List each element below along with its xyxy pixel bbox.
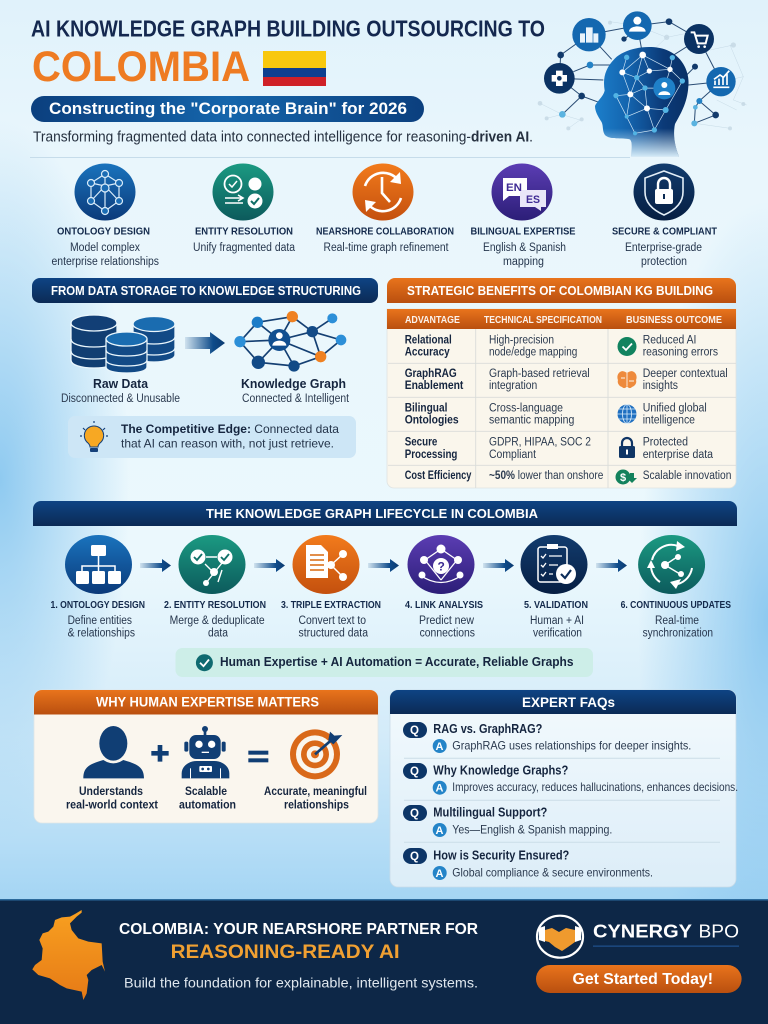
label: raw data bbox=[61, 377, 180, 405]
FAQ 3 bbox=[403, 805, 612, 837]
callout: human expertise plus AI: Human Expertise + AI Automation = Accurate, Reliable Graphs bbox=[220, 654, 574, 669]
step 6: continuous updates bbox=[621, 535, 731, 640]
row: bilingual ontologies bbox=[405, 402, 707, 427]
step 4: link analysis: ? bbox=[438, 560, 445, 574]
FAQ 4: Q bbox=[410, 851, 419, 863]
step 6: continuous updates: Real-time bbox=[655, 615, 699, 627]
callout: competitive edge: that AI can reason with, not just retrieve. bbox=[121, 436, 334, 450]
feature: bilingual expertise: EN bbox=[506, 182, 522, 194]
step 6: continuous updates: 6. CONTINUOUS UPDATES bbox=[621, 599, 731, 611]
step 1: ontology design: Define entities bbox=[68, 615, 132, 627]
logo: Cynergy BPO: BPO bbox=[698, 921, 739, 942]
feature: secure and compliant: protection bbox=[641, 256, 687, 268]
arrow bbox=[483, 559, 514, 572]
caption: automation: Scalable bbox=[185, 786, 227, 798]
heading bbox=[387, 278, 736, 303]
footer banner bbox=[0, 899, 768, 1024]
feature: nearshore collaboration: Real-time graph refinement bbox=[324, 242, 449, 254]
step 6: continuous updates: synchronization bbox=[643, 628, 713, 640]
FAQ 4 bbox=[403, 848, 653, 880]
FAQ 1: A bbox=[436, 741, 444, 753]
feature row bbox=[52, 164, 718, 268]
heading: WHY HUMAN EXPERTISE MATTERS bbox=[96, 695, 319, 710]
step 4: link analysis: 4. LINK ANALYSIS bbox=[405, 599, 483, 611]
label: raw data: Disconnected & Unusable bbox=[61, 393, 180, 405]
footer tagline: Build the foundation for explainable, intelligent systems. bbox=[124, 975, 478, 991]
feature: ontology design: enterprise relationships bbox=[52, 256, 159, 268]
row: relational accuracy: Accuracy bbox=[405, 347, 450, 359]
row: relational accuracy: reasoning errors bbox=[643, 347, 718, 359]
arrow bbox=[185, 332, 225, 354]
feature: entity resolution: Unify fragmented data bbox=[193, 242, 296, 254]
row: cost efficiency: ~50% lower than onshore bbox=[489, 470, 603, 482]
arrow bbox=[140, 559, 171, 572]
heading bbox=[33, 501, 737, 526]
step 4: link analysis: Predict new bbox=[419, 615, 475, 627]
step 3: triple extraction bbox=[281, 535, 381, 640]
row: relational accuracy: Reduced AI bbox=[643, 334, 696, 346]
FAQ 1: RAG vs. GraphRAG? bbox=[433, 722, 542, 736]
FAQ 1 bbox=[403, 722, 691, 753]
icon: human, robot, target equation bbox=[83, 726, 342, 779]
FAQ 3: Multilingual Support? bbox=[433, 805, 547, 819]
logo: Cynergy BPO: CYNERGY bbox=[593, 921, 693, 942]
arrow bbox=[368, 559, 399, 572]
feature: nearshore collaboration: NEARSHORE COLLABORATION bbox=[316, 226, 454, 238]
heading bbox=[390, 690, 736, 714]
row: graphrag enablement: Deeper contextual bbox=[643, 368, 728, 380]
feature: secure and compliant: SECURE & COMPLIANT bbox=[612, 226, 718, 238]
row: secure processing: Processing bbox=[405, 449, 457, 461]
panel: from data storage to knowledge structuring bbox=[32, 278, 378, 458]
row: graphrag enablement: Graph-based retrieval bbox=[489, 368, 590, 380]
FAQ 3: Yes—English & Spanish mapping. bbox=[452, 822, 612, 836]
FAQ 1: GraphRAG uses relationships for deeper insights. bbox=[452, 738, 691, 752]
step 4: link analysis bbox=[405, 535, 483, 640]
feature: ontology design: Model complex bbox=[70, 242, 140, 254]
icon: map of Colombia bbox=[32, 910, 105, 1000]
logo: Cynergy BPO bbox=[537, 916, 739, 958]
feature: ontology design: ONTOLOGY DESIGN bbox=[57, 226, 150, 238]
heading: STRATEGIC BENEFITS OF COLOMBIAN KG BUILDING bbox=[407, 283, 713, 298]
row: bilingual ontologies: Ontologies bbox=[405, 415, 459, 427]
feature: bilingual expertise: mapping bbox=[503, 256, 544, 268]
FAQ 2: Why Knowledge Graphs? bbox=[433, 763, 568, 777]
arrow bbox=[596, 559, 627, 572]
icon: Colombian flag bbox=[263, 51, 326, 86]
footer headline: COLOMBIA: YOUR NEARSHORE PARTNER FOR bbox=[119, 921, 478, 938]
footer highlight: REASONING-READY AI bbox=[171, 941, 400, 963]
header bbox=[30, 11, 747, 158]
heading: EXPERT FAQs bbox=[522, 695, 615, 710]
step 2: entity resolution: 2. ENTITY RESOLUTION bbox=[164, 599, 266, 611]
step 5: validation bbox=[520, 535, 588, 640]
icon: knowledge graph network bbox=[234, 311, 346, 372]
step 5: validation: 5. VALIDATION bbox=[524, 599, 588, 611]
feature: bilingual expertise: BILINGUAL EXPERTISE bbox=[470, 226, 576, 238]
row: graphrag enablement: insights bbox=[643, 380, 678, 392]
row: relational accuracy bbox=[405, 334, 718, 359]
panel: knowledge graph lifecycle bbox=[33, 501, 737, 677]
FAQ 2 bbox=[403, 763, 738, 795]
button: get started: Get Started Today! bbox=[572, 971, 713, 988]
row: bilingual ontologies: semantic mapping bbox=[489, 415, 574, 427]
step 5: validation: verification bbox=[533, 628, 582, 640]
label: knowledge graph: Knowledge Graph bbox=[241, 377, 346, 391]
table header row: TECHNICAL SPECIFICATION bbox=[484, 314, 602, 326]
step 1: ontology design: & relationships bbox=[68, 628, 135, 640]
panel: strategic benefits table bbox=[387, 278, 736, 488]
row: graphrag enablement: GraphRAG bbox=[405, 368, 457, 380]
row: cost efficiency: Scalable innovation bbox=[643, 470, 731, 482]
row: cost efficiency: $ bbox=[620, 472, 626, 484]
FAQ 4: Global compliance & secure environments. bbox=[452, 865, 653, 879]
row: bilingual ontologies: intelligence bbox=[643, 415, 695, 427]
row: bilingual ontologies: Unified global bbox=[643, 402, 707, 414]
feature: nearshore collaboration bbox=[316, 164, 454, 254]
title: AI KNOWLEDGE GRAPH BUILDING OUTSOURCING TO bbox=[31, 16, 545, 42]
step 1: ontology design: 1. ONTOLOGY DESIGN bbox=[50, 599, 145, 611]
feature: bilingual expertise bbox=[470, 164, 576, 268]
title country: COLOMBIA bbox=[32, 43, 250, 91]
row: relational accuracy: High-precision bbox=[489, 334, 554, 346]
feature: entity resolution bbox=[193, 164, 296, 254]
row: cost efficiency bbox=[405, 470, 731, 484]
caption: human: real-world context bbox=[66, 799, 158, 811]
heading: THE KNOWLEDGE GRAPH LIFECYCLE IN COLOMBIA bbox=[206, 506, 539, 521]
table header row: ADVANTAGE bbox=[405, 314, 460, 326]
caption: automation: automation bbox=[179, 799, 236, 811]
heading: FROM DATA STORAGE TO KNOWLEDGE STRUCTURING bbox=[51, 283, 361, 298]
panel: why human expertise matters bbox=[34, 690, 378, 823]
subtitle pill: Constructing the "Corporate Brain" for 2026 bbox=[49, 100, 407, 118]
caption: result bbox=[264, 786, 367, 811]
table bbox=[387, 309, 736, 488]
illustration: head with knowledge network bbox=[538, 11, 747, 158]
row: secure processing: Protected bbox=[643, 436, 688, 448]
subtitle pill bbox=[31, 96, 424, 122]
icon: raw data stacks bbox=[71, 315, 175, 373]
row: secure processing: GDPR, HIPAA, SOC 2 bbox=[489, 436, 591, 448]
FAQ 1: Q bbox=[410, 725, 419, 737]
row: bilingual ontologies: Bilingual bbox=[405, 402, 447, 414]
label: knowledge graph: Connected & Intelligent bbox=[242, 393, 350, 405]
step 4: link analysis: connections bbox=[420, 628, 475, 640]
row: relational accuracy: Relational bbox=[405, 334, 452, 346]
caption: human bbox=[66, 786, 158, 811]
caption: automation bbox=[179, 786, 236, 811]
row: relational accuracy: node/edge mapping bbox=[489, 347, 577, 359]
row: graphrag enablement: integration bbox=[489, 380, 537, 392]
row: secure processing: Secure bbox=[405, 436, 437, 448]
label: raw data: Raw Data bbox=[93, 377, 149, 391]
step 3: triple extraction: Convert text to bbox=[298, 615, 366, 627]
table header row bbox=[387, 309, 736, 329]
caption: result: relationships bbox=[284, 799, 349, 811]
heading bbox=[32, 278, 378, 303]
row: secure processing: Compliant bbox=[489, 449, 537, 461]
callout: competitive edge: The Competitive Edge: Connected data bbox=[121, 422, 339, 436]
feature: bilingual expertise: English & Spanish bbox=[483, 242, 566, 254]
label: knowledge graph bbox=[241, 377, 350, 405]
row: graphrag enablement: Enablement bbox=[405, 380, 464, 392]
arrow bbox=[254, 559, 285, 572]
table header row: BUSINESS OUTCOME bbox=[626, 314, 722, 326]
button: get started bbox=[536, 965, 742, 993]
step 5: validation: Human + AI bbox=[530, 615, 584, 627]
caption: result: Accurate, meaningful bbox=[264, 786, 367, 798]
feature: entity resolution: ENTITY RESOLUTION bbox=[195, 226, 293, 238]
row: graphrag enablement bbox=[405, 368, 728, 392]
step 3: triple extraction: 3. TRIPLE EXTRACTION bbox=[281, 599, 381, 611]
FAQ 2: Q bbox=[410, 766, 419, 778]
feature: ontology design bbox=[52, 164, 159, 268]
row: bilingual ontologies: Cross-language bbox=[489, 402, 563, 414]
step 2: entity resolution: Merge & deduplicate bbox=[170, 615, 265, 627]
caption: human: Understands bbox=[79, 786, 143, 798]
FAQ 3: Q bbox=[410, 808, 419, 820]
row: cost efficiency: Cost Efficiency bbox=[405, 470, 472, 482]
FAQ 4: How is Security Ensured? bbox=[433, 848, 569, 862]
step 3: triple extraction: structured data bbox=[298, 628, 369, 640]
FAQ 4: A bbox=[436, 868, 444, 880]
callout: human expertise plus AI bbox=[176, 648, 593, 677]
FAQ 2: A bbox=[436, 783, 444, 795]
step 2: entity resolution bbox=[164, 535, 266, 640]
row: secure processing: enterprise data bbox=[643, 449, 714, 461]
tagline: Transforming fragmented data into connected intelligence for reasoning-driven AI. bbox=[33, 130, 533, 146]
step 1: ontology design bbox=[50, 535, 145, 640]
feature: secure and compliant bbox=[612, 164, 718, 268]
panel: expert FAQs bbox=[390, 690, 738, 887]
feature: bilingual expertise: ES bbox=[526, 194, 540, 206]
icon: light bulb bbox=[80, 421, 108, 452]
row: secure processing bbox=[405, 436, 714, 461]
feature: secure and compliant: Enterprise-grade bbox=[625, 242, 702, 254]
FAQ 3: A bbox=[436, 825, 444, 837]
step 2: entity resolution: data bbox=[208, 628, 229, 640]
heading bbox=[34, 690, 378, 714]
callout: competitive edge bbox=[68, 416, 356, 458]
